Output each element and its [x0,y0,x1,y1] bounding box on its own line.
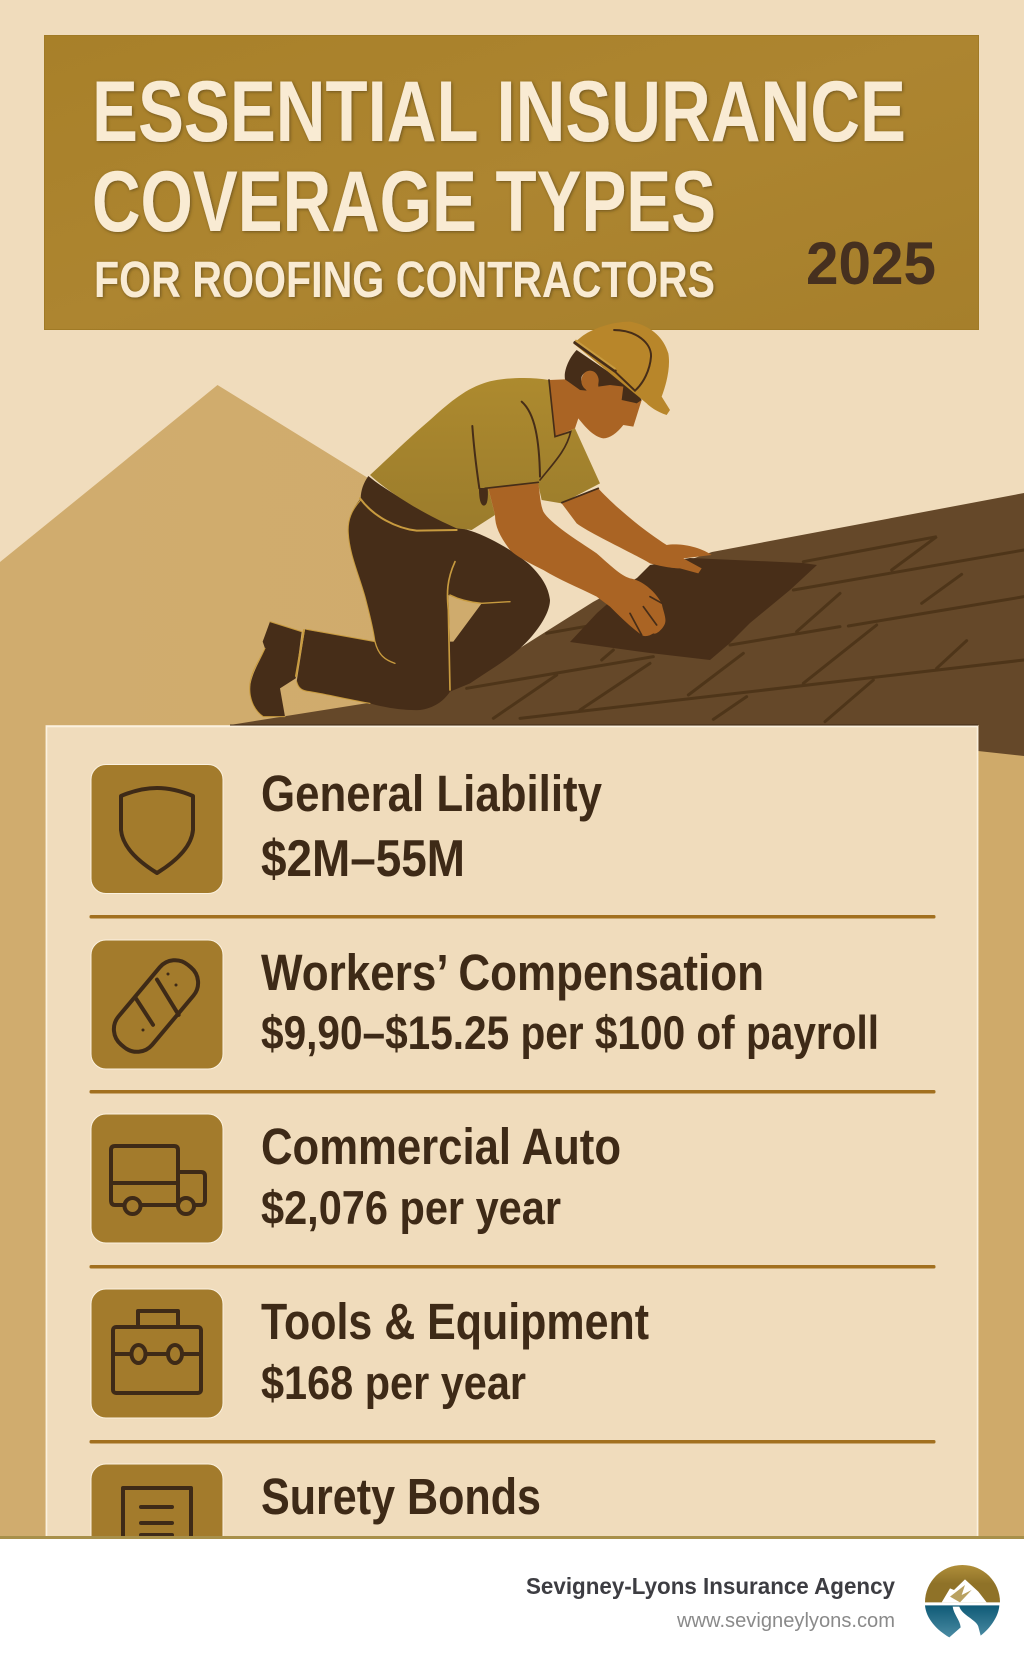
coverage name and cost [261,1293,649,1409]
shirt [370,378,600,530]
divider [90,1265,936,1268]
coverage name and cost: $168 per year [261,1356,526,1409]
illustration: roof with shingles [230,493,1024,756]
coverage name and cost: Commercial Auto [261,1118,621,1175]
icon: toolbox [91,1289,223,1418]
row: surety bonds [91,1464,541,1564]
title banner [44,36,978,330]
coverage name and cost: General Liability [261,765,603,822]
row: tools and equipment [91,1289,649,1418]
hair [565,350,642,403]
coverage name and cost: Tools & Equipment [261,1293,649,1350]
shirt seams [472,380,598,505]
footer [0,1536,1024,1666]
year label: 2025 [806,230,936,297]
row: general liability [91,764,603,894]
divider [90,1090,936,1094]
coverage name and cost [261,765,603,888]
coverage name and cost [261,1118,621,1234]
main title [92,64,906,308]
neck and face [549,379,642,438]
icon: shield [91,764,223,894]
coverage name and cost: $2,076 per year [261,1181,561,1234]
coverage name: Surety Bonds [261,1468,541,1525]
coverage name and cost: $2M–55M [261,830,465,888]
illustration: roofer far arm [562,488,712,573]
icon: truck [91,1114,223,1243]
row: commercial auto [91,1114,621,1243]
icon: agency logo [925,1565,1000,1637]
icon: document [91,1464,223,1564]
divider [90,915,936,918]
illustration: roofer legs and boot [250,476,550,717]
icon: bandage [91,940,223,1069]
coverage name and cost: Workers’ Compensation [261,944,764,1001]
mountain backdrop [0,385,1024,1540]
agency name: Sevigney-Lyons Insurance Agency [526,1573,895,1599]
illustration: shingle held by roofer [570,558,817,660]
main title: FOR ROOFING CONTRACTORS [94,251,715,308]
near arm [488,483,665,636]
coverage name and cost: $9,90–$15.25 per $100 of payroll [261,1006,879,1059]
divider [90,1440,936,1444]
main title: COVERAGE TYPES [92,154,716,250]
agency website: www.sevigneylyons.com [676,1610,895,1632]
hard hat [573,322,670,415]
illustration: roofer torso, near arm, head and hard hat [370,322,670,636]
panel: coverage list [46,725,978,1564]
coverage name and cost [261,944,879,1059]
row: workers compensation [91,940,879,1069]
ear [581,371,599,391]
